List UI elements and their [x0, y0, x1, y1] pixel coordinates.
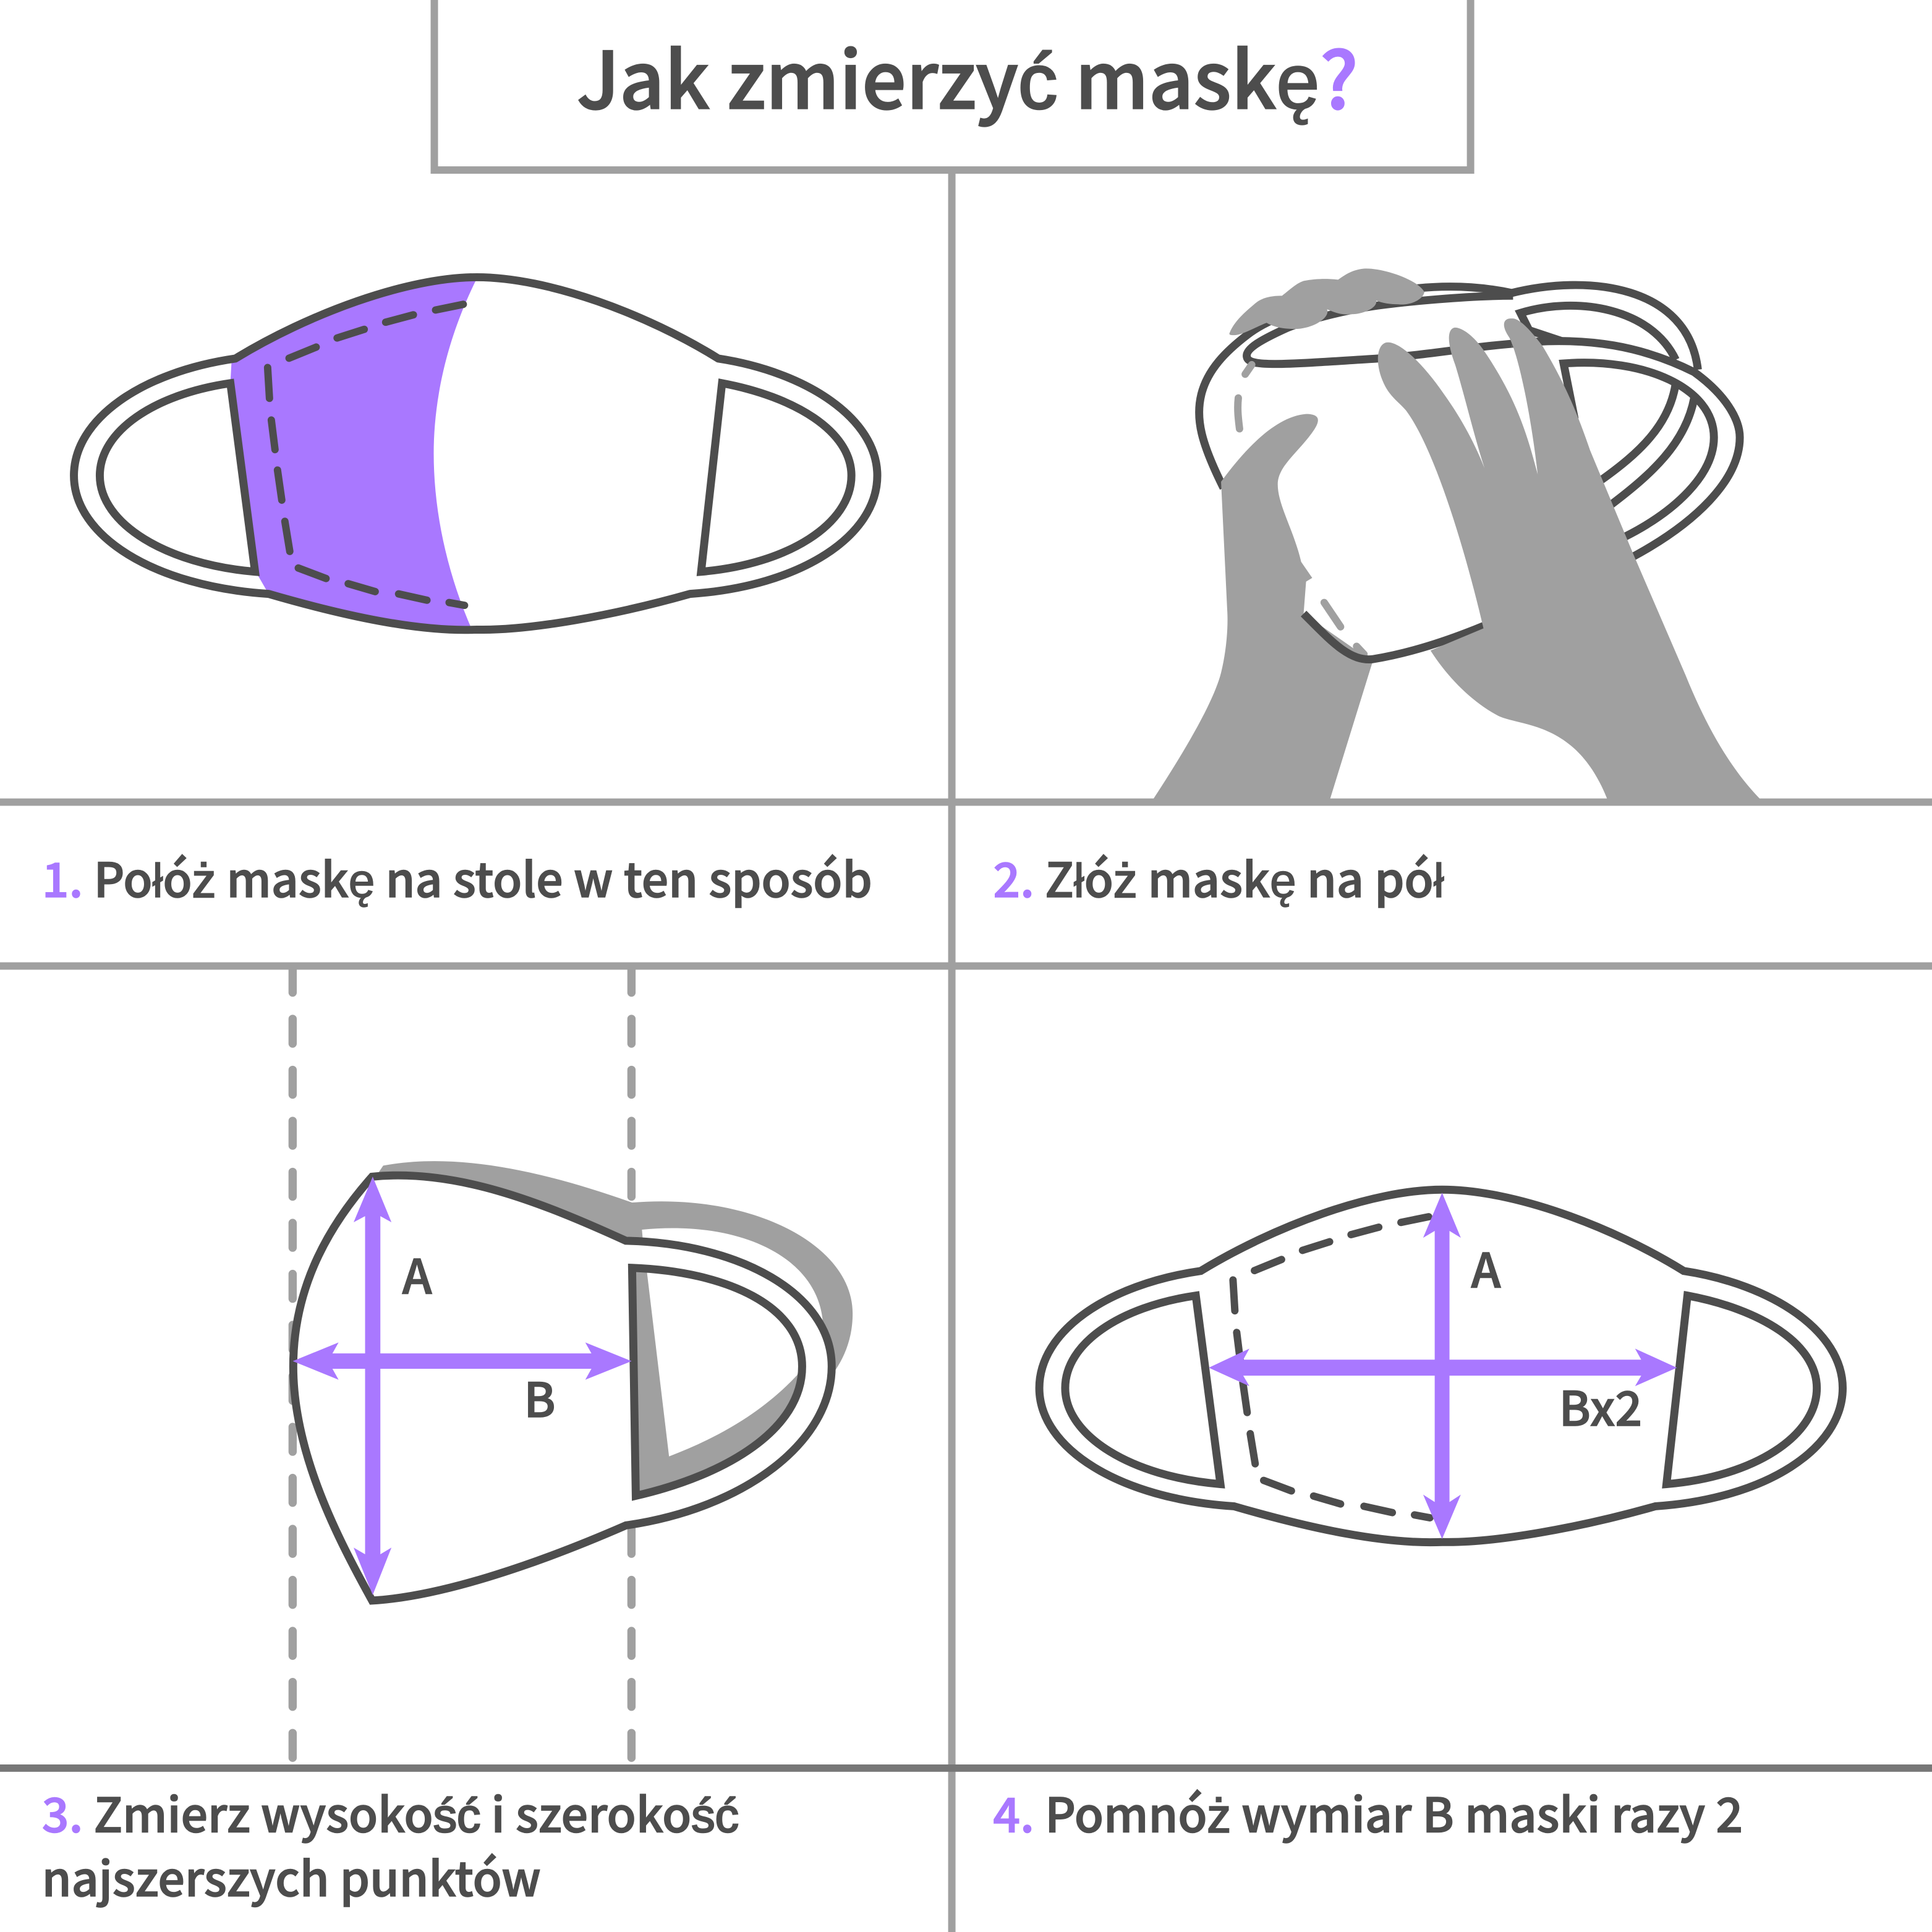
left hand [1152, 414, 1372, 801]
dashed fold line [268, 304, 464, 605]
back ear loop [1510, 285, 1698, 505]
left ear loop [100, 383, 255, 572]
panel: step 2 hands folding the mask [1152, 268, 1762, 801]
front layer of mask [293, 1175, 832, 1601]
label Bx2: Bx2 [1559, 1371, 1642, 1440]
mask outline [74, 277, 877, 630]
folded mask outline [1199, 287, 1513, 488]
ear loop outline [632, 1268, 802, 1496]
back layer of mask [376, 1161, 853, 1370]
title: Jak zmierzyć maskę? [577, 18, 1358, 131]
ear opening hole [647, 1272, 801, 1457]
mask outlines [1039, 1189, 1843, 1543]
label B: B [524, 1363, 556, 1431]
panel: step 4 flat mask with measurements [1039, 1189, 1843, 1543]
step 3 caption: najszerszych punktów [42, 1842, 541, 1910]
step 1 caption: 1. Połóż maskę na stole w ten sposób [42, 843, 872, 911]
fingers on top of mask [1229, 268, 1424, 335]
step 2 caption: 2. Złóż maskę na pół [993, 843, 1444, 911]
purple half of mask [231, 278, 477, 630]
step 3 caption: 3. Zmierz wysokość i szerokość [42, 1778, 739, 1847]
panel: step 3 folded mask with measurements [292, 968, 853, 1764]
arrows A and B [293, 1177, 632, 1595]
label A: A [1471, 1233, 1501, 1302]
panel: step 1 flat mask [74, 277, 877, 630]
label A: A [402, 1240, 432, 1308]
title box [435, 0, 1471, 170]
front ear loop [1512, 341, 1740, 557]
right hand [1378, 318, 1762, 801]
right ear loop [701, 383, 851, 572]
arrows A and Bx2 [1209, 1193, 1677, 1539]
dashed guide lines [292, 968, 631, 1764]
hidden seam dashes [1238, 365, 1364, 654]
ear opening with back layer [632, 1268, 802, 1496]
step 4 caption: 4. Pomnóż wymiar B maski razy 2 [993, 1778, 1743, 1847]
mask bottom edge [1304, 614, 1484, 660]
